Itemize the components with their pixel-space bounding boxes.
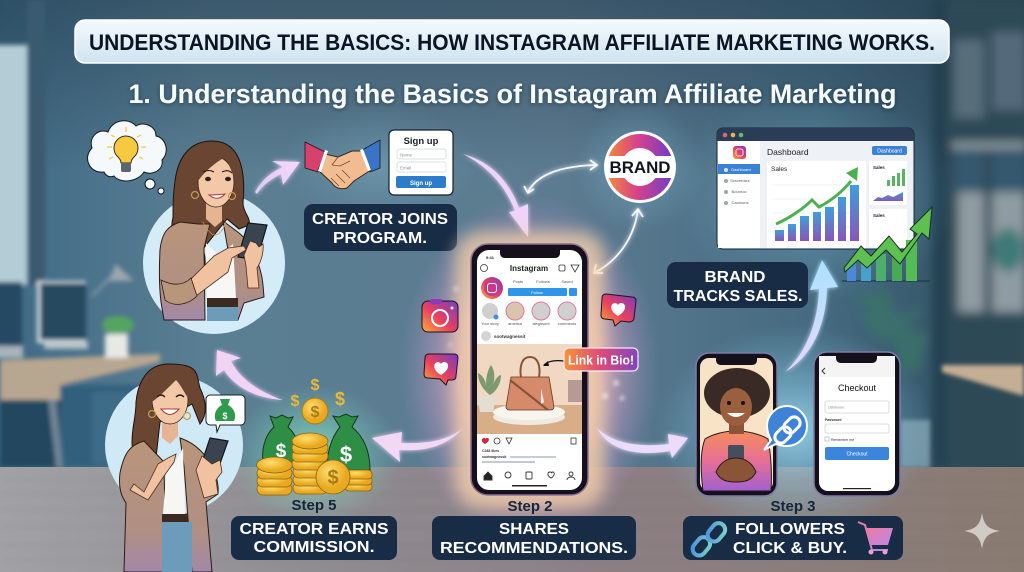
stories row: aiegssont [532, 321, 550, 326]
icon: money bags and coins: $ [291, 393, 300, 410]
bubble: money bag: $ [222, 411, 228, 421]
icon: brand logo [604, 131, 676, 203]
title banner: UNDERSTANDING THE BASICS: HOW INSTAGRAM AFFILIATE MARKETING WORKS. [89, 30, 935, 55]
side cards [869, 161, 907, 247]
phone: checkout: Password [825, 418, 842, 422]
label: step 3: Step 3 [770, 498, 816, 515]
action row and caption [482, 438, 576, 463]
character circle: creator [143, 192, 285, 334]
sign up form card: Email [400, 166, 411, 170]
title banner [75, 20, 949, 63]
character: creator celebrating [119, 364, 228, 572]
icon: camera [422, 299, 458, 332]
phone: checkout: Remember me [831, 438, 854, 442]
phone: checkout: Checkout [846, 452, 868, 458]
sidebar: Bournoc [732, 189, 746, 194]
icon: watermark sparkle [964, 513, 1000, 549]
icon: chain [690, 520, 728, 558]
arrow: phone to followers [597, 428, 688, 458]
icon: money bags and coins: $ [335, 389, 345, 409]
arrow: creator to handshake [255, 161, 300, 194]
arrow: brand and phone two way right [594, 209, 643, 273]
label: followers click and buy [683, 516, 903, 560]
stories row [481, 302, 576, 326]
phone: checkout [814, 352, 900, 496]
icon: money bags and coins: $ [276, 441, 287, 462]
subtitle: 1. Understanding the Basics of Instagram Affiliate Marketing [128, 79, 896, 109]
label: creator joins program: CREATOR JOINS [312, 211, 448, 228]
sign up form card [389, 130, 453, 195]
sales chart [767, 161, 866, 248]
icon: thought bubble with light bulb [88, 121, 166, 194]
icon: handshake [305, 140, 380, 189]
label: brand tracks sales: BRAND [704, 269, 766, 286]
label: shares recommendations: SHARES [499, 521, 569, 538]
sidebar: Scscreoles [730, 178, 750, 183]
action row and caption: C283 likes [482, 449, 499, 453]
sign up form card: Sign up [404, 136, 439, 147]
side cards: Sales [873, 165, 885, 170]
action row and caption: sootwagnessit [482, 455, 507, 459]
label: shares recommendations: RECOMMENDATIONS. [440, 540, 628, 557]
label: brand tracks sales [667, 262, 808, 308]
phone: checkout: Checkout [838, 383, 877, 393]
icon: link bubble [764, 406, 807, 450]
sidebar: Cannions [732, 200, 748, 205]
profile row: Follow [531, 290, 543, 295]
stories row: amelica [508, 321, 523, 326]
label: creator earns commission: CREATOR EARNS [240, 521, 388, 538]
arrow: followers to dashboard [785, 260, 838, 372]
stories row: comments [558, 321, 576, 326]
sidebar [718, 141, 760, 248]
side cards: Sales [873, 213, 885, 218]
label: creator earns commission: COMMISSION. [254, 539, 374, 556]
phone: follower [696, 353, 777, 496]
label: step 5: Step 5 [291, 497, 337, 514]
sales chart: Sales [771, 166, 788, 173]
icon: money bags and coins [256, 377, 372, 495]
profile row: Posts [513, 279, 523, 284]
icon: money bags and coins: $ [311, 404, 320, 421]
icon: growth arrow with bars [842, 207, 932, 281]
icon: heart bubble left [424, 354, 458, 385]
arrow: brand and phone two way top [524, 160, 597, 193]
sparkles [448, 287, 624, 400]
bubble: money bag [206, 395, 245, 432]
post image: bag [477, 344, 582, 434]
profile row [481, 277, 577, 299]
dashboard window: Dashboard [877, 148, 902, 154]
label: shares recommendations [432, 516, 636, 560]
profile row: Follows [536, 279, 550, 284]
app header: Instagram [510, 264, 548, 273]
icon: money bags and coins: $ [340, 442, 352, 467]
sign up form card: Sign up [410, 181, 432, 187]
icon: cart [858, 522, 893, 554]
dashboard window: Dashboard [767, 147, 809, 157]
label: creator joins program [304, 204, 457, 251]
phone: instagram post: 9:41 [486, 255, 495, 260]
label: brand tracks sales: TRACKS SALES. [674, 288, 802, 305]
arrow: money to creator [216, 350, 283, 400]
icon: brand logo: BRAND [610, 158, 670, 177]
phone: instagram post [455, 232, 605, 508]
arrow: signup to phone [463, 154, 528, 237]
sign up form card: Name [400, 152, 413, 158]
character: creator with phone [159, 141, 267, 321]
label: followers click and buy: CLICK & BUY. [733, 540, 847, 557]
icon: money bags and coins: $ [311, 377, 320, 394]
app header [480, 264, 579, 273]
phone: checkout: Usfoboom [828, 406, 844, 410]
arrow: phone to money [372, 428, 463, 462]
phone: instagram post: sootwagnessit [494, 334, 526, 339]
label: followers click and buy: FOLLOWERS [735, 521, 845, 538]
label: creator earns commission [231, 516, 397, 560]
callout: link in bio [543, 348, 638, 371]
character circle: earning creator [105, 376, 243, 514]
stories row: Your story [481, 321, 499, 326]
profile row: Saved [561, 279, 573, 284]
dashboard window [717, 128, 914, 249]
bottom nav [484, 472, 575, 480]
label: creator joins program: PROGRAM. [333, 230, 427, 247]
icon: heart bubble right [601, 294, 636, 326]
label: step 2: Step 2 [507, 498, 553, 515]
callout: link in bio: Link in Bio! [568, 352, 634, 368]
icon: money bags and coins: $ [327, 467, 339, 489]
sidebar: Dashboard [731, 167, 751, 172]
